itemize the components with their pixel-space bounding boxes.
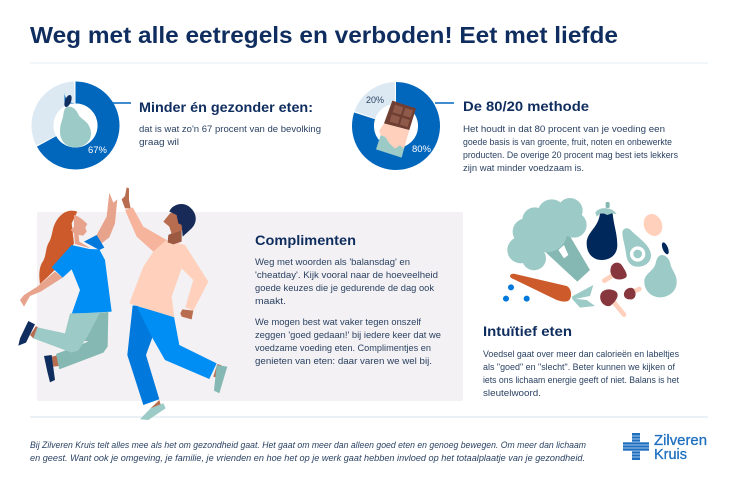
text block	[139, 124, 321, 148]
logo: Zilveren Kruis: Zilveren	[654, 432, 707, 449]
eggplant	[587, 202, 617, 260]
logo: Zilveren Kruis	[623, 432, 707, 463]
text block: goede keuzes die je gedurende de dag ook	[255, 283, 434, 294]
donut chart: 67 percent: 67%	[88, 145, 108, 156]
text block: sleutelwoord.	[483, 388, 541, 399]
footer text: en geest. Want ook je omgeving, je familie, je vrienden en hoe het op je werk gaat hebben invloed op het totaalplaatje van je gezondheid.	[30, 453, 585, 463]
man	[122, 187, 227, 420]
heading: Complimenten	[255, 233, 356, 248]
text block	[463, 124, 678, 174]
text block: voedzame voeding eten. Complimentjes en	[255, 343, 431, 354]
text block: goede basis is van groente, fruit, noten en onbewerkte	[463, 137, 672, 148]
text block: We mogen best wat vaker tegen onszelf	[255, 317, 421, 328]
donut chart: 67 percent	[42, 92, 108, 158]
mushrooms	[600, 263, 639, 315]
text block: graag wil	[139, 137, 179, 148]
carrot	[510, 274, 595, 308]
text block: dat is wat zo'n 67 procent van de bevolking	[139, 124, 321, 135]
illustration: vegetables	[503, 198, 677, 315]
egg	[640, 211, 666, 239]
icon: pear	[60, 94, 91, 147]
text block: Het houdt in dat 80 procent van je voeding een	[463, 124, 665, 135]
text block: iets ons lichaam energie geeft of niet. Balans is het	[483, 375, 679, 386]
text block	[483, 349, 679, 399]
icon: chocolate bar	[376, 101, 416, 158]
panel: intuitief eten	[483, 324, 679, 399]
heading: Intuïtief eten	[483, 324, 572, 339]
text block: zijn wat minder voedzaam is.	[463, 163, 584, 174]
donut chart: 80 percent: 20%	[366, 95, 385, 106]
heading: Minder én gezonder eten:	[139, 99, 313, 115]
text block: Voedsel gaat over meer dan calorieën en labeltjes	[483, 349, 679, 360]
title: Weg met alle eetregels en verboden! Eet met liefde	[30, 22, 618, 48]
pear	[644, 241, 677, 297]
logo: Zilveren Kruis: Kruis	[654, 446, 687, 463]
text block: Weg met woorden als 'balansdag' en	[255, 257, 410, 268]
woman	[18, 193, 117, 382]
panel: de 80/20 methode	[363, 93, 678, 174]
broccoli	[507, 198, 590, 282]
text block: 'cheatday'. Kijk vooral naar de hoeveelheid	[255, 270, 438, 281]
panel: complimenten	[37, 212, 463, 401]
text block: maakt.	[255, 296, 286, 307]
text block	[255, 257, 438, 307]
text block: zeggen 'goed gedaan!' bij iedere keer dat we	[255, 330, 441, 341]
donut chart: 80 percent	[363, 93, 432, 159]
footer text: Bij Zilveren Kruis telt alles mee als het om gezondheid gaat. Het gaat om meer dan alleen goed eten en genoeg bewegen. Om meer dan lichaam	[30, 440, 586, 450]
text block: producten. De overige 20 procent mag best iets lekkers	[463, 150, 678, 161]
avocado	[622, 228, 651, 267]
illustration: high five	[18, 187, 227, 420]
text block: als "goed" en "slecht". Beter kunnen we kijken of	[483, 362, 675, 373]
heading: De 80/20 methode	[463, 98, 589, 114]
footer text	[30, 440, 586, 463]
dots	[503, 284, 530, 302]
donut chart: 80 percent: 80%	[412, 144, 432, 155]
text block	[255, 317, 441, 367]
panel: minder en gezonder eten	[42, 92, 321, 158]
text block: genieten van eten: daar varen we wel bij.	[255, 356, 432, 367]
